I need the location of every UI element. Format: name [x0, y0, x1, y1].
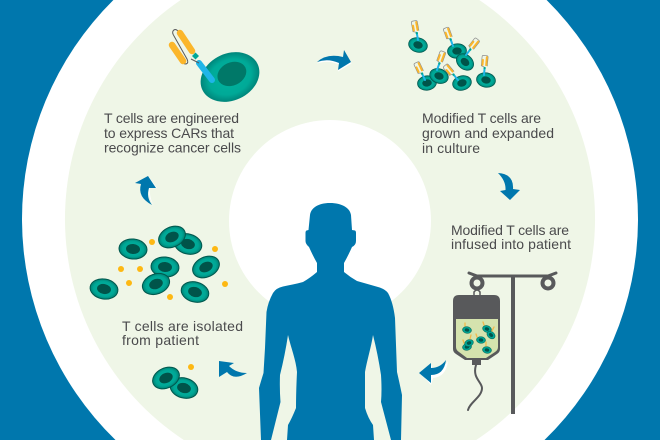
arrow: step 4 to blood cells: [219, 361, 247, 377]
IV pole: [469, 273, 556, 414]
step 2 text: [422, 110, 554, 156]
infusion tube: [468, 365, 482, 410]
patient silhouette: [259, 203, 402, 440]
cells in bag: [462, 322, 497, 354]
collected T cells and particles: [88, 222, 228, 305]
arrow: back to step 1: [135, 176, 157, 206]
isolated T cell: [149, 363, 200, 401]
step 2 text: Modified T cells are: [422, 110, 541, 126]
step 1 text: to express CARs that: [104, 125, 234, 141]
step 1 text: recognize cancer cells: [104, 140, 241, 156]
white center circle: [229, 120, 431, 322]
step 3 text: Modified T cells are: [451, 222, 569, 238]
step 3 text: [451, 222, 571, 252]
step 1: engineered CAR T cell: [172, 30, 268, 111]
step 4 text: from patient: [122, 332, 199, 348]
IV stand and bag: [453, 273, 556, 414]
arrow: step 3 to 4: [419, 360, 448, 385]
step 4 text: T cells are isolated: [122, 318, 243, 334]
step 1 text: T cells are engineered: [104, 110, 239, 126]
large T cell: [192, 43, 268, 111]
arrow: step 1 to 2: [317, 50, 352, 72]
chimeric antigen receptor: [172, 30, 212, 80]
bag fluid: [456, 319, 498, 358]
step 1 text: [104, 110, 241, 156]
step 2 text: grown and expanded: [422, 125, 554, 141]
step 4 text: [122, 318, 243, 348]
step 2: expanded modified T cells: [407, 20, 497, 92]
step 2 text: in culture: [422, 140, 480, 156]
IV bag: [453, 295, 500, 365]
step 3 text: infused into patient: [451, 236, 571, 252]
arrow: step 2 to 3: [498, 173, 520, 200]
